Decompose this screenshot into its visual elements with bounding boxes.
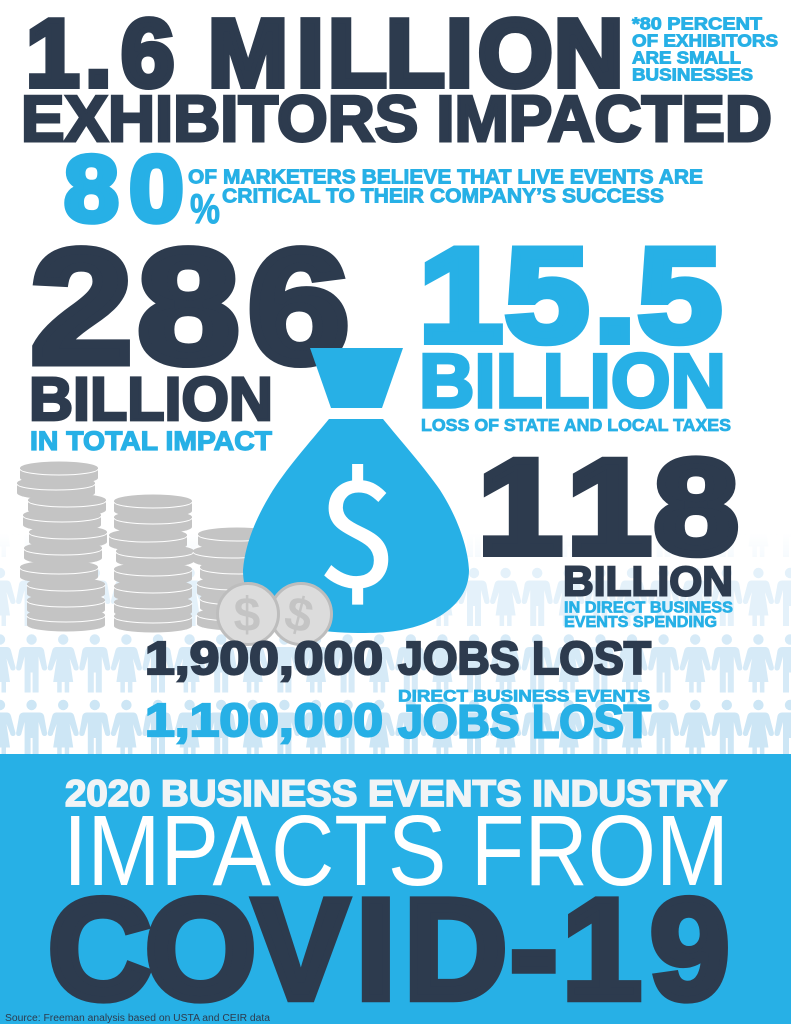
small-business note: [632, 14, 778, 84]
stat: 1,900,000 jobs lost: JOBS LOST: [398, 632, 651, 684]
stat: 1,100,000 direct jobs lost: 1,100,000: [145, 694, 383, 746]
coin stacks: [17, 462, 278, 632]
small-business note: ARE SMALL: [632, 48, 741, 68]
source note: Source: Freeman analysis based on USTA and CEIR data: [5, 1013, 270, 1024]
stat: 118 billion: BILLION: [563, 558, 733, 604]
small-business note: OF EXHIBITORS: [632, 30, 778, 50]
stat: 286 billion: IN TOTAL IMPACT: [30, 426, 273, 456]
stat: 80 percent of marketers: 80: [64, 137, 184, 241]
title band: [0, 754, 791, 1024]
stat: 1,100,000 direct jobs lost: DIRECT BUSINESS EVENTS: [398, 686, 650, 706]
stat: 80 percent of marketers: [64, 137, 703, 241]
stat: 1,900,000 jobs lost: 1,900,000: [145, 632, 383, 684]
stat: 1,100,000 direct jobs lost: [145, 686, 651, 748]
stat: 15.5 billion: 15.5: [419, 222, 722, 370]
silver coins: $: [280, 587, 319, 644]
stat: 1,100,000 direct jobs lost: JOBS LOST: [398, 696, 651, 748]
stat: 80 percent of marketers: CRITICAL TO THEIR COMPANY’S SUCCESS: [222, 184, 664, 207]
stat: 118 billion: 118: [478, 433, 738, 582]
stat: 286 billion: BILLION: [29, 365, 273, 433]
stat: 286 billion: 286: [31, 217, 349, 397]
money bag icon: $: [317, 418, 397, 628]
stat: 80 percent of marketers: OF MARKETERS BELIEVE THAT LIVE EVENTS ARE: [188, 165, 703, 188]
stat: 118 billion: IN DIRECT BUSINESS: [564, 599, 733, 616]
stat: 15.5 billion: LOSS OF STATE AND LOCAL TAXES: [421, 415, 731, 435]
stat: 15.5 billion: [419, 222, 731, 435]
silver coins: $: [234, 589, 261, 642]
money bag icon: [243, 348, 469, 633]
people pattern background: [0, 490, 791, 758]
title line: 2020 business events industry: 2020 BUSINESS EVENTS INDUSTRY: [65, 773, 727, 814]
headline: 1.6 million: 1.6 MILLION: [26, 0, 623, 107]
stat: 1,900,000 jobs lost: [145, 632, 651, 684]
stat: 118 billion: EVENTS SPENDING: [564, 614, 717, 631]
small-business note: *80 PERCENT: [632, 14, 762, 34]
stat: 15.5 billion: BILLION: [419, 339, 726, 424]
stat: 80 percent of marketers: %: [190, 185, 220, 232]
small-business note: BUSINESSES: [632, 64, 753, 84]
headline: exhibitors impacted: EXHIBITORS IMPACTED: [21, 82, 772, 155]
silver coins: [218, 584, 332, 644]
